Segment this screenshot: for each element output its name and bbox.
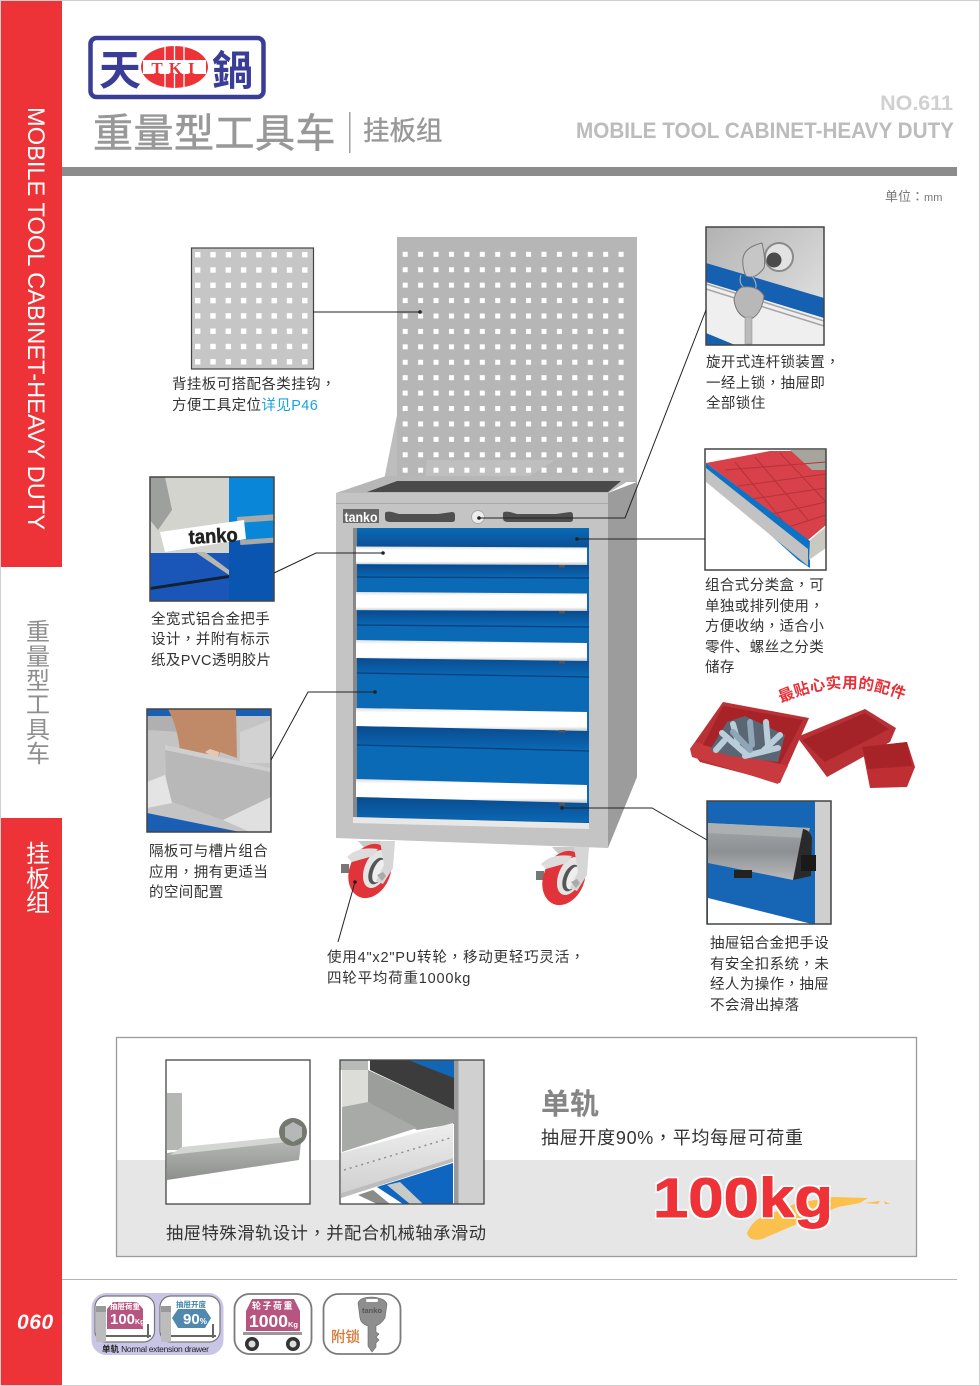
sidebar: vertical Chinese category: 型 [26,668,50,695]
photo: key lock [706,227,824,345]
leader line: divider [271,690,377,760]
badge: lock included: tanko [362,1306,382,1315]
logo: TKI [151,59,201,78]
sidebar: red tab with subcategory [1,818,62,1385]
tanko badge: tanko [344,509,378,525]
badge: caster load 1000kg: 1000Kg [249,1311,298,1331]
sidebar: red tab with subcategory: 板 [26,866,50,893]
caption: compartment tray: 零件、螺丝之分类 [705,639,824,656]
caption: slide rail: 抽屉特殊滑轨设计，并配合机械轴承滑动 [166,1219,486,1244]
leader line: caster [338,880,357,942]
caption: label holder: 纸及PVC透明胶片 [151,652,271,669]
leader line: compartment tray [575,537,705,541]
sidebar: red tab with English title [1,1,62,567]
footer rule [62,1279,957,1280]
logo: 天 [99,37,141,98]
photo: label holder handle: tanko [188,524,238,549]
leader line: pegboard [313,310,422,314]
sidebar: vertical Chinese category: 重 [26,619,50,646]
inset: pegboard detail [192,248,314,369]
badge: lock included [324,1294,400,1354]
photo: red trays with bolts [690,702,915,788]
caption: safety latch: 抽屉铝合金把手设 [710,936,829,952]
sidebar: vertical Chinese category [26,619,50,768]
sidebar: red tab with English title: MOBILE TOOL CABINET-HEAVY DUTY [22,107,49,530]
left caster [341,837,399,905]
sidebar: vertical Chinese category: 工 [26,692,50,719]
caption: compartment tray: ，适合小 [765,615,824,636]
title: model number and English name: NO.611 [880,91,953,115]
caption: pegboard: 方便工具定位 [172,397,261,414]
photo: label holder handle [150,477,274,601]
sidebar: vertical Chinese category: 量 [26,644,50,671]
caption: label holder: ，并附有标示 [181,628,270,649]
caption: label holder: 设计 [151,631,181,648]
caption: safety latch: ，抽屉 [784,973,829,994]
badge: opening 90 percent [160,1296,220,1342]
caption: divider: ，拥有更适当 [179,861,268,882]
caption: compartment tray: 单独或排列使用 [705,598,809,615]
badge: opening 90 percent: 90% [183,1311,207,1328]
badge: caster load 1000kg: 轮子荷重 [252,1300,294,1311]
caption: compartment tray: 储存 [705,659,735,676]
drawer latches [559,565,565,806]
header rule [62,167,957,176]
aluminium drawer handles [356,546,587,803]
title: Chinese product name [93,112,442,156]
heading: single rail: 单轨 [541,1088,599,1121]
caption: lock: ，抽屉即 [766,372,825,393]
text: opening and load: 抽屉开度90%，平均每屉可荷重 [541,1124,803,1150]
caption: label holder: 全宽式铝合金把手 [151,612,270,628]
badge: drawer load 100kg: 抽屉荷重 [110,1301,140,1311]
photo: handle safety latch [707,801,831,924]
caption: safety latch: 不会滑出掉落 [710,997,799,1014]
caption: safety latch: 经人为操作 [710,976,784,993]
yellow brush stroke [747,1197,890,1240]
load figure: 100kg [653,1166,833,1229]
sidebar: vertical Chinese category: 车 [26,741,50,768]
photo: open drawer [340,1060,484,1204]
cabinet top surface [336,476,637,493]
caption: lock: 全部锁住 [706,394,766,412]
caption: compartment tray: 组合式分类盒，可 [705,574,824,595]
caption: divider: 应用 [149,863,179,881]
caption: compartment tray: 方便收纳 [705,618,765,635]
unit label: 单位：mm [885,186,942,205]
caption: divider: 隔板可与槽片组合 [149,844,268,860]
caption: safety latch: 有安全扣系统 [710,955,799,973]
badge: lock included: 附锁 [331,1329,360,1346]
badge: drawer load 100kg: 100Kg [110,1311,144,1328]
arched red slogan: 最贴心实用的配件 [778,675,906,703]
badge: drawer load and opening: 单轨 Normal extension drawer [102,1344,209,1354]
pegboard back panel [384,237,637,482]
cabinet front frame [336,493,608,848]
photo: slide bracket [166,1060,310,1204]
leader line: label holder [274,551,385,573]
leader line: key lock [477,310,706,520]
logo: 鍋 [212,37,253,97]
page number: 060 [17,1311,54,1334]
badge: drawer load and opening [92,1293,224,1355]
cabinet side [608,482,637,848]
title: model number and English name [576,91,954,143]
title: Chinese product name: 重量型工具车 [93,112,336,156]
sidebar: red tab with subcategory: 挂 [26,841,50,868]
caption: lock: 一经上锁 [706,375,766,392]
panel: slide rail [116,1038,916,1256]
right caster [535,844,593,912]
drawer stack [353,528,589,829]
caption: caster: 四轮平均荷重1000kg [327,970,471,987]
cabinet [336,476,637,912]
tool tray recess [367,481,621,492]
badge: drawer load 100kg [95,1296,154,1342]
caption: safety latch: ，未 [799,953,829,974]
logo [90,37,264,98]
title: Chinese product name: 挂板组 [363,116,442,146]
sidebar: vertical Chinese category: 具 [26,717,50,744]
caption: compartment tray: ， [809,595,824,616]
caption: divider: 的空间配置 [149,884,224,901]
caption: pegboard: 背挂板可搭配各类挂钩， [172,373,336,394]
top handles and lock [385,510,573,524]
caption: caster: 使用4"x2"PU转轮，移动更轻巧灵活， [327,946,585,967]
badge: caster load 1000kg [234,1294,312,1354]
sidebar: red tab with subcategory: 组 [26,890,50,917]
caption: lock: 旋开式连杆锁装置， [706,351,840,372]
photo: red compartment tray [705,449,826,570]
leader line: safety latch [560,806,707,840]
title: model number and English name: MOBILE TOOL CABINET-HEAVY DUTY [576,118,954,143]
photo: divider with hand [147,709,271,832]
badge: opening 90 percent: 抽屉开度 [176,1299,206,1309]
caption: pegboard: 详见P46 [261,397,318,414]
